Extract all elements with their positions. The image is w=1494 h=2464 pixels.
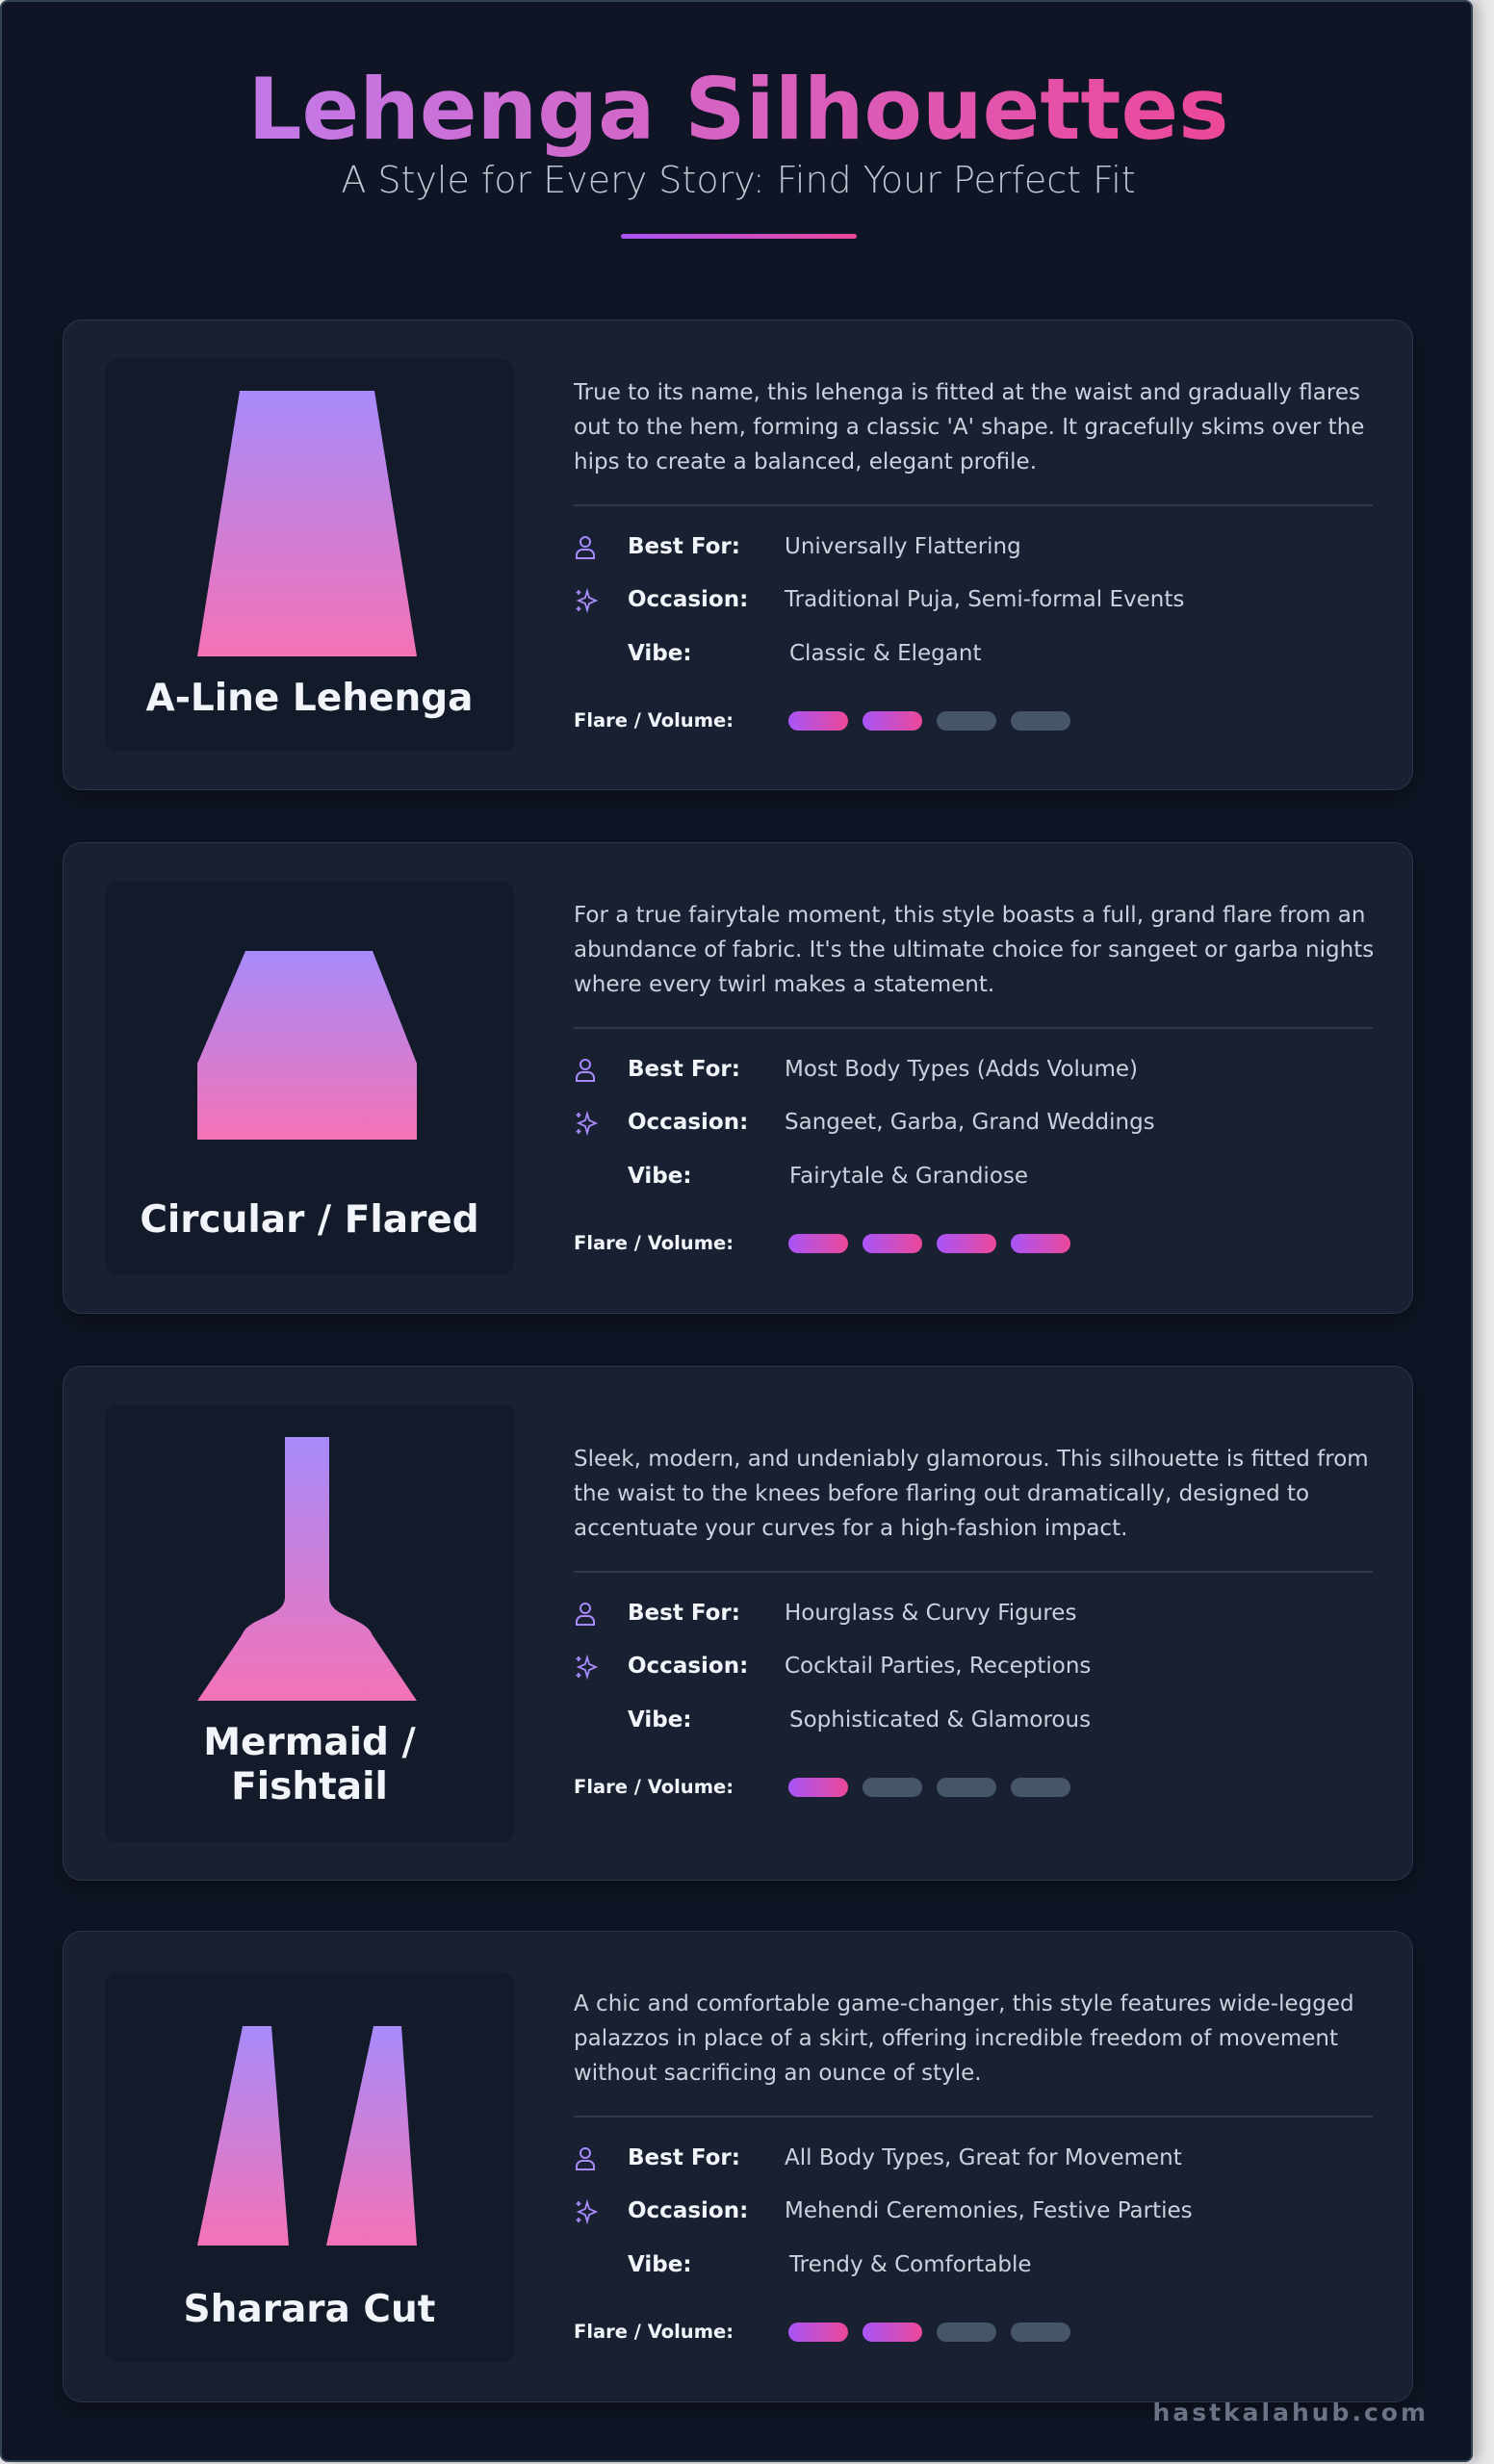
occasion bbox=[576, 2198, 1193, 2224]
vibe: Vibe: bbox=[628, 2252, 692, 2277]
details: A-Line: hips to create a balanced, elegant profile. bbox=[574, 449, 1037, 475]
vibe: Fairytale & Grandiose bbox=[789, 1164, 1028, 1189]
illustration: A-Line: A-Line Lehenga bbox=[146, 677, 473, 720]
title: Lehenga Silhouettes bbox=[247, 60, 1229, 159]
best for bbox=[576, 1601, 1076, 1626]
occasion: Occasion: bbox=[628, 2198, 748, 2223]
subtitle: A Style for Every Story: Find Your Perfect Fit bbox=[341, 159, 1136, 201]
details: Sharara: palazzos in place of a skirt, offering incredible freedom of movement bbox=[574, 2026, 1338, 2051]
details: Circular: For a true fairytale moment, this style boasts a full, grand flare from an bbox=[574, 903, 1365, 928]
occasion bbox=[576, 1654, 1091, 1680]
details: Sharara bbox=[574, 1991, 1373, 2343]
best for: Universally Flattering bbox=[785, 534, 1021, 559]
occasion: Traditional Puja, Semi-formal Events bbox=[785, 587, 1184, 612]
details: Mermaid: the waist to the knees before flaring out dramatically, designed to bbox=[574, 1481, 1309, 1506]
vibe bbox=[628, 2252, 1032, 2277]
occasion: Mehendi Ceremonies, Festive Parties bbox=[785, 2198, 1193, 2223]
details: A-Line bbox=[574, 380, 1373, 732]
best for bbox=[576, 2145, 1182, 2170]
flare meter: Flare / Volume: bbox=[574, 1232, 734, 1254]
illustration: A-Line bbox=[105, 359, 514, 752]
flare meter: Flare / Volume: bbox=[574, 2321, 734, 2343]
occasion bbox=[576, 587, 1184, 613]
illustration: Mermaid bbox=[105, 1404, 514, 1842]
vibe bbox=[628, 1707, 1091, 1732]
vibe: Vibe: bbox=[628, 1164, 692, 1189]
title underline bbox=[621, 234, 857, 239]
best for: Most Body Types (Adds Volume) bbox=[785, 1057, 1138, 1082]
details: Circular bbox=[574, 903, 1374, 1254]
best for: All Body Types, Great for Movement bbox=[785, 2145, 1182, 2170]
vibe: Sophisticated & Glamorous bbox=[789, 1707, 1091, 1732]
vibe: Vibe: bbox=[628, 641, 692, 666]
panel: A-Line bbox=[63, 320, 1413, 790]
details: A-Line: out to the hem, forming a classic 'A' shape. It gracefully skims over the bbox=[574, 415, 1364, 440]
illustration: Circular: Circular / Flared bbox=[140, 1198, 479, 1242]
vibe: Vibe: bbox=[628, 1707, 692, 1732]
vibe bbox=[628, 1164, 1028, 1189]
illustration: Circular bbox=[105, 882, 514, 1274]
flare meter bbox=[574, 2321, 1070, 2343]
vibe bbox=[628, 641, 981, 666]
details: Circular: where every twirl makes a statement. bbox=[574, 972, 994, 997]
flare meter bbox=[574, 709, 1070, 732]
flare meter: Flare / Volume: bbox=[574, 709, 734, 732]
occasion bbox=[576, 1110, 1155, 1136]
panel: Mermaid bbox=[63, 1366, 1413, 1881]
flare meter bbox=[574, 1776, 1070, 1798]
details: Circular: abundance of fabric. It's the ultimate choice for sangeet or garba nights bbox=[574, 937, 1374, 962]
illustration: Sharara bbox=[105, 1972, 514, 2362]
illustration: Mermaid: Fishtail bbox=[231, 1765, 388, 1809]
panel: Sharara bbox=[63, 1931, 1413, 2402]
occasion: Cocktail Parties, Receptions bbox=[785, 1654, 1091, 1679]
illustration: Sharara: Sharara Cut bbox=[184, 2288, 435, 2331]
occasion: Sangeet, Garba, Grand Weddings bbox=[785, 1110, 1155, 1135]
details: A-Line: True to its name, this lehenga is fitted at the waist and gradually flares bbox=[574, 380, 1360, 405]
details: Sharara: A chic and comfortable game-changer, this style features wide-legged bbox=[574, 1991, 1354, 2016]
best for bbox=[576, 534, 1021, 559]
illustration: Mermaid: Mermaid / bbox=[203, 1721, 416, 1764]
flare meter: Flare / Volume: bbox=[574, 1776, 734, 1798]
best for: Best For: bbox=[628, 2145, 740, 2170]
vibe: Classic & Elegant bbox=[789, 641, 981, 666]
best for bbox=[576, 1057, 1138, 1082]
vibe: Trendy & Comfortable bbox=[789, 2252, 1032, 2277]
details: Mermaid bbox=[574, 1447, 1373, 1798]
occasion: Occasion: bbox=[628, 1654, 748, 1679]
details: Sharara: without sacrificing an ounce of style. bbox=[574, 2061, 982, 2086]
occasion: Occasion: bbox=[628, 1110, 748, 1135]
best for: Best For: bbox=[628, 1057, 740, 1082]
flare meter bbox=[574, 1232, 1070, 1254]
occasion: Occasion: bbox=[628, 587, 748, 612]
panel: Circular bbox=[63, 842, 1413, 1314]
best for: Best For: bbox=[628, 1601, 740, 1626]
details: Mermaid: Sleek, modern, and undeniably glamorous. This silhouette is fitted from bbox=[574, 1447, 1369, 1472]
best for: Hourglass & Curvy Figures bbox=[785, 1601, 1076, 1626]
watermark: hastkalahub.com bbox=[1153, 2399, 1429, 2426]
best for: Best For: bbox=[628, 534, 740, 559]
details: Mermaid: accentuate your curves for a high-fashion impact. bbox=[574, 1516, 1127, 1541]
